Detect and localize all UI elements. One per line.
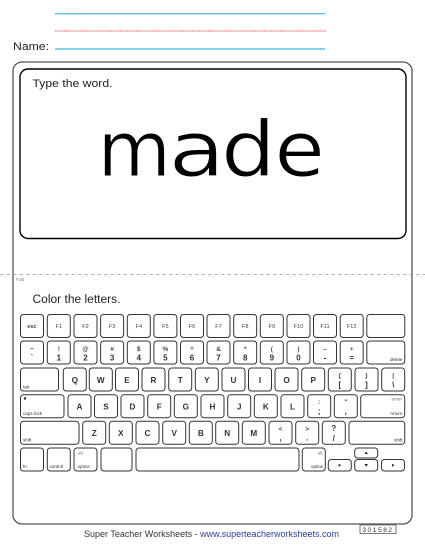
keyboard row: home keys: J	[237, 402, 241, 412]
keyboard row: shift keys: shift	[394, 438, 403, 442]
keyboard row: QWERTY keys: |	[392, 372, 394, 380]
keyboard row: number keys: 1	[57, 354, 62, 362]
keyboard row: home keys: :	[318, 399, 320, 406]
keyboard row: number keys: *	[244, 346, 247, 353]
keyboard row: home keys: return	[390, 411, 403, 416]
keyboard row: bottom modifier keys and space bar: control	[50, 464, 63, 469]
keyboard row: home keys: F	[157, 402, 162, 412]
panel: type the word	[20, 69, 406, 238]
name writing lines	[55, 14, 326, 49]
keyboard row: home keys: L	[290, 402, 295, 412]
keyboard row: number keys: (	[271, 346, 274, 353]
keyboard row: bottom modifier keys and space bar: alt	[78, 450, 84, 456]
keyboard row: bottom modifier keys and space bar: fn	[23, 464, 27, 469]
keyboard row: QWERTY keys: Y	[204, 376, 210, 385]
keyboard row: function keys: F5	[162, 324, 169, 330]
keyboard row: number keys: ^	[190, 345, 194, 353]
fold label: Fold	[16, 277, 25, 282]
keyboard row: number keys: #	[110, 346, 114, 353]
worksheet code box	[360, 525, 396, 534]
keyboard row: function keys: F2	[82, 324, 89, 330]
keyboard row: QWERTY keys: P	[310, 376, 316, 385]
keyboard row: home keys: K	[263, 402, 269, 412]
keyboard row: QWERTY keys: R	[151, 376, 157, 385]
keyboard row: number keys: ~	[30, 346, 34, 353]
keyboard row: function keys: F12	[347, 324, 357, 330]
keyboard row: number keys: 6	[190, 354, 195, 362]
panel: outer worksheet frame	[13, 62, 412, 524]
keyboard row: shift keys: >	[305, 426, 309, 433]
keyboard row: function keys: F10	[294, 324, 303, 330]
keyboard row: bottom modifier keys and space bar: option	[78, 464, 90, 469]
heading: word made: d	[221, 105, 276, 195]
keyboard row: bottom modifier keys and space bar	[20, 448, 325, 471]
keyboard	[20, 314, 405, 471]
keyboard row: shift keys: M	[250, 429, 257, 438]
keyboard row: home keys: S	[103, 402, 109, 412]
instruction: color the letters: Color the letters.	[32, 294, 120, 306]
keyboard row: number keys: 5	[163, 354, 168, 362]
keyboard row: function keys: F11	[320, 324, 330, 330]
keyboard row: function keys: F3	[109, 324, 115, 330]
keyboard row: home keys: caps lock	[23, 411, 43, 416]
keyboard row: home keys: ,	[345, 407, 347, 416]
keyboard row: function keys: F1	[56, 324, 62, 330]
keyboard row: function keys: esc	[27, 324, 37, 330]
keyboard row: number keys: 8	[243, 354, 248, 362]
keyboard row: number keys: delete	[390, 357, 403, 362]
keyboard row: function keys	[20, 314, 405, 338]
heading: word made: m	[98, 104, 171, 194]
keyboard row: shift keys: C	[145, 429, 151, 438]
keyboard row: number keys: &	[216, 346, 221, 353]
keyboard row: number keys: $	[137, 346, 141, 353]
keyboard arrow keys	[328, 448, 404, 471]
keyboard row: QWERTY keys: U	[231, 376, 237, 385]
keyboard row: shift keys	[20, 421, 405, 444]
keyboard row: shift keys: X	[118, 429, 124, 438]
heading: word made: e	[274, 104, 325, 194]
keyboard row: function keys: F9	[269, 324, 275, 330]
keyboard row: number keys: !	[58, 346, 60, 353]
keyboard row: number keys: –	[323, 346, 327, 353]
keyboard row: shift keys: shift	[23, 438, 32, 442]
keyboard row: number keys: 7	[216, 354, 221, 362]
keyboard row: number keys: )	[297, 346, 300, 353]
keyboard row: shift keys: .	[306, 434, 308, 442]
keyboard row: QWERTY keys: {	[339, 372, 342, 380]
keyboard row: shift keys: <	[279, 426, 283, 433]
keyboard row: QWERTY keys: tab	[23, 384, 30, 390]
keyboard row: QWERTY keys: }	[365, 372, 368, 380]
keyboard row: QWERTY keys: \	[392, 380, 395, 390]
instruction: type the word: Type the word.	[32, 78, 112, 90]
keyboard row: QWERTY keys: T	[178, 376, 183, 385]
keyboard row: QWERTY keys: [	[338, 380, 341, 390]
keyboard row: QWERTY keys	[20, 368, 405, 391]
keyboard row: number keys: +	[350, 346, 354, 353]
keyboard row: shift keys: V	[171, 429, 177, 438]
keyboard row: number keys: =	[349, 354, 354, 362]
keyboard row: QWERTY keys: W	[97, 376, 105, 385]
worksheet code box: 301582	[362, 527, 394, 534]
heading: word made	[98, 104, 325, 195]
keyboard row: home keys: G	[183, 402, 189, 412]
keyboard row: shift keys: N	[224, 429, 230, 438]
keyboard row: QWERTY keys: I	[259, 376, 261, 385]
name label: Name:	[13, 41, 49, 53]
keyboard row: function keys: F7	[215, 324, 222, 330]
keyboard row: function keys: F8	[242, 324, 248, 330]
keyboard row: home keys: "	[344, 399, 347, 406]
keyboard row: home keys: H	[210, 402, 216, 412]
keyboard row: shift keys: Z	[92, 429, 97, 438]
keyboard row: home keys: enter	[392, 396, 402, 402]
keyboard row: number keys: 3	[110, 354, 115, 362]
keyboard row: QWERTY keys: E	[124, 376, 130, 385]
keyboard row: shift keys: /	[333, 434, 336, 443]
keyboard row: number keys: 0	[296, 354, 301, 362]
keyboard row: shift keys: ?	[331, 424, 336, 433]
keyboard row: home keys: A	[77, 402, 83, 412]
keyboard row: home keys: ;	[318, 407, 321, 416]
keyboard row: number keys: 9	[270, 354, 275, 362]
keyboard row: number keys: @	[82, 346, 89, 353]
keyboard row: number keys: 2	[83, 354, 88, 362]
keyboard row: shift keys: ,	[279, 434, 282, 442]
keyboard row: home keys: D	[130, 402, 136, 412]
heading: word made: a	[168, 105, 225, 195]
keyboard row: bottom modifier keys and space bar: option	[311, 464, 324, 469]
keyboard row: bottom modifier keys and space bar: alt	[318, 450, 323, 456]
keyboard row: home keys	[20, 395, 405, 418]
keyboard row: number keys: -	[324, 354, 327, 362]
keyboard row: number keys: %	[163, 346, 169, 353]
keyboard row: number keys: `	[31, 354, 34, 362]
keyboard row: number keys: 4	[137, 354, 142, 362]
keyboard row: function keys: F6	[189, 324, 195, 330]
keyboard row: number keys	[20, 341, 405, 364]
keyboard row: QWERTY keys: ]	[365, 380, 368, 390]
fold line	[0, 274, 425, 276]
footer credit: Super Teacher Worksheets - www.superteacherworksheets.com	[84, 529, 339, 539]
keyboard row: QWERTY keys: Q	[72, 376, 79, 385]
keyboard row: shift keys: B	[198, 429, 204, 438]
keyboard row: QWERTY keys: O	[283, 376, 290, 385]
keyboard row: function keys: F4	[136, 324, 142, 330]
